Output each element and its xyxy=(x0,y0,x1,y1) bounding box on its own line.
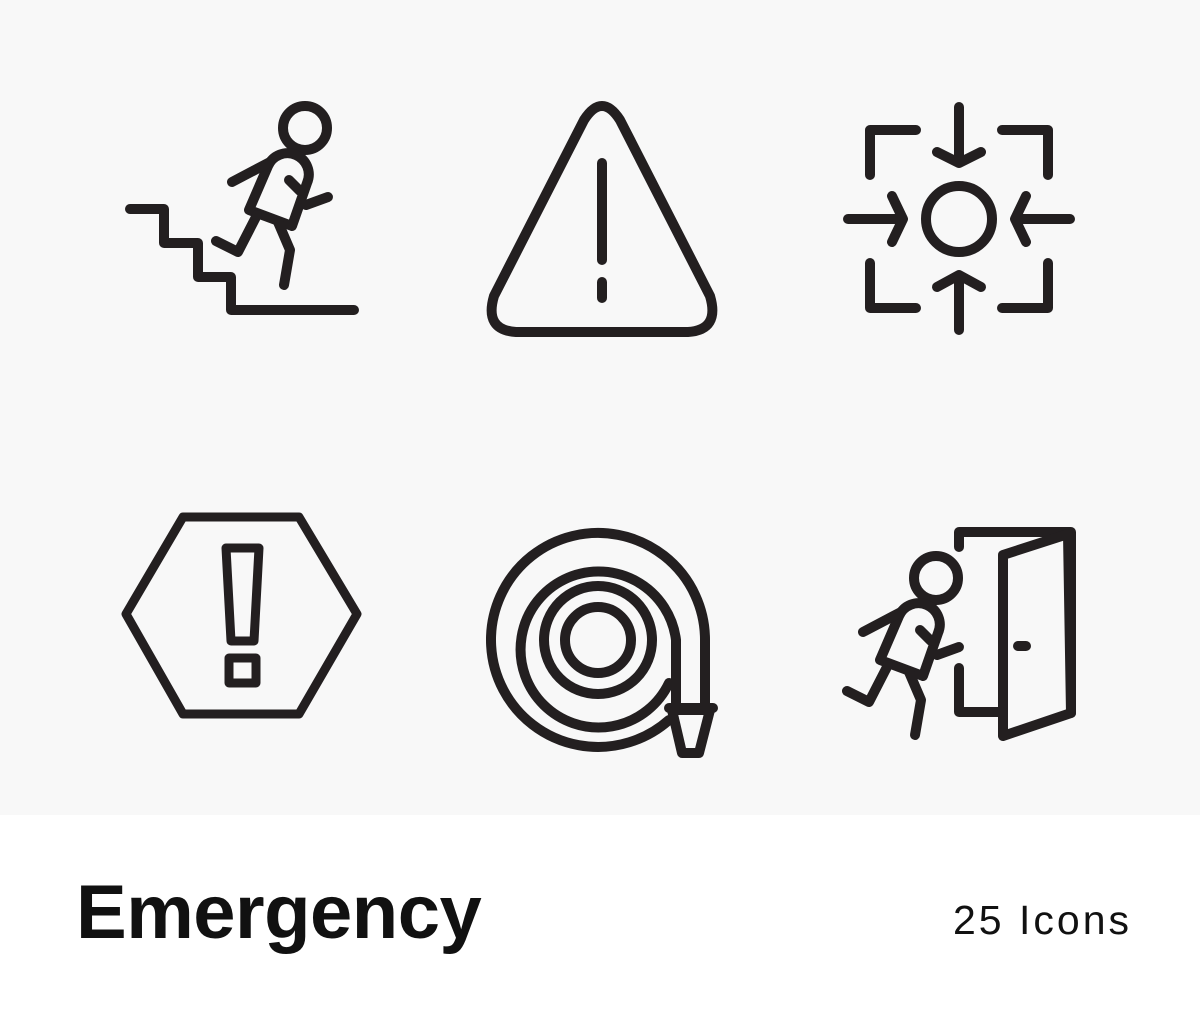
title: Emergency xyxy=(76,870,481,955)
icon: emergency exit xyxy=(847,532,1071,736)
icon: assembly point xyxy=(848,107,1070,330)
icon: running down stairs xyxy=(130,106,354,310)
icon: hexagon alert xyxy=(126,517,357,714)
icon: warning triangle xyxy=(492,106,712,332)
icon: fire hose xyxy=(491,533,713,753)
subtitle: icon count: 25 Icons xyxy=(953,897,1132,943)
